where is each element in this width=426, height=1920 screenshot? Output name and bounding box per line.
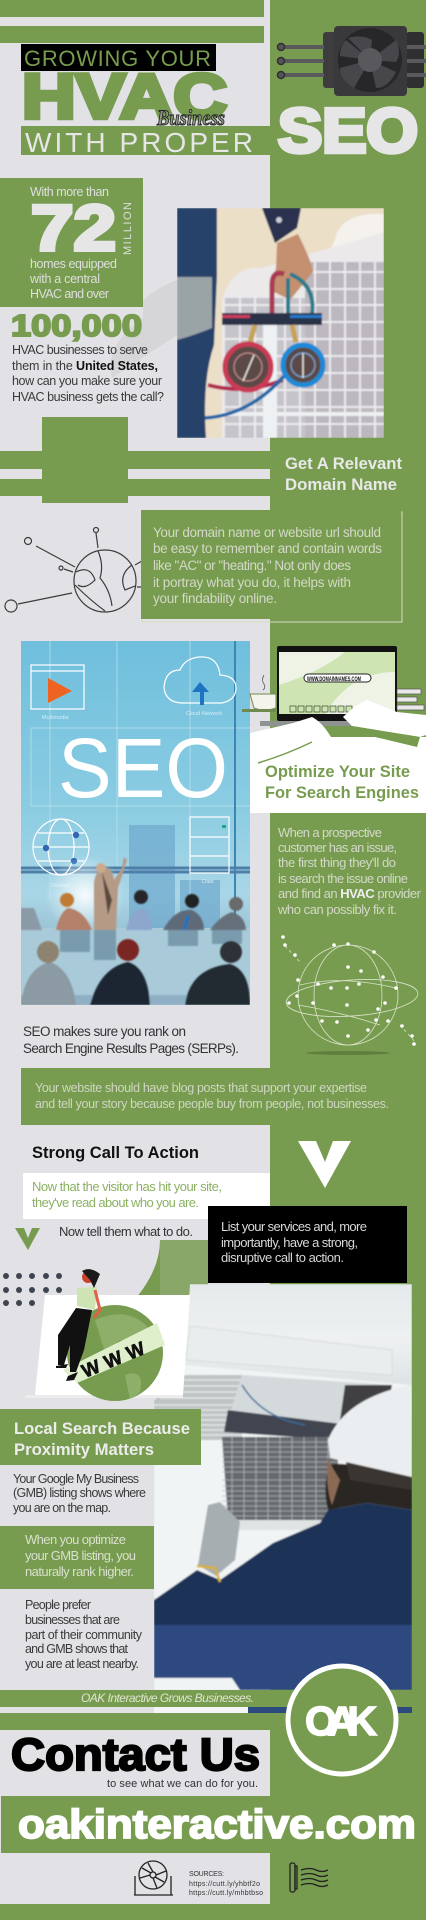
stat: 100,000 businesses: how can you make sure your bbox=[12, 374, 162, 388]
photo: technician with manifold gauges bbox=[177, 208, 384, 438]
logo: OAK badge: OAK bbox=[305, 1698, 377, 1744]
title: SEO bbox=[278, 97, 418, 166]
callout: visitor has hit your site: they've read about who you are. bbox=[32, 1195, 199, 1210]
panel: contact us: Contact Us bbox=[11, 1729, 260, 1780]
decorative dot grid bbox=[3, 1273, 62, 1306]
photo: SEO meeting room: Domain bbox=[51, 883, 70, 889]
band: OAK tagline: OAK Interactive Grows Businesses. bbox=[81, 1691, 254, 1705]
text: SEO makes sure bbox=[23, 1024, 239, 1056]
green background below tagline bbox=[0, 1713, 426, 1920]
panel: domain name text: your findability online. bbox=[153, 591, 277, 606]
panel: call to action text: importantly, have a strong, bbox=[221, 1235, 358, 1250]
top green bars bbox=[0, 0, 264, 43]
text: people prefer: and GMB shows that bbox=[25, 1642, 129, 1656]
stat: 100,000 businesses: HVAC business gets the call? bbox=[12, 390, 164, 404]
photo: SEO meeting room: Multimedia bbox=[42, 715, 70, 721]
panel: sources footer: https://cutt.ly/yhbtf2o bbox=[189, 1881, 260, 1888]
panel: optimize your site heading bbox=[250, 700, 426, 813]
stat: 100,000 businesses: HVAC businesses to serve bbox=[12, 343, 148, 357]
text: people prefer bbox=[25, 1598, 143, 1671]
panel: contact us bbox=[0, 1729, 270, 1795]
heading: get a relevant domain name: Domain Name bbox=[285, 476, 397, 494]
icon: large white chevron bbox=[298, 1141, 351, 1188]
band: OAK tagline bbox=[0, 1690, 426, 1707]
icon: dotted network globe bbox=[281, 935, 419, 1055]
panel: 72 million stat: With more than bbox=[30, 185, 109, 199]
panel: optimize GMB: When you optimize bbox=[25, 1532, 126, 1547]
panel: 72 million stat: with a central bbox=[29, 272, 100, 286]
panel: domain name text bbox=[141, 510, 402, 622]
callout: visitor has hit your site: Now that the visitor has hit your site, bbox=[32, 1179, 222, 1194]
panel: domain name text: it portray what you do, it helps with bbox=[153, 575, 351, 590]
text: prospective customer: the first thing they'll do bbox=[278, 855, 396, 870]
band: blog posts: and tell your story because people buy from people, not businesses. bbox=[35, 1097, 389, 1111]
stat: 100,000 businesses bbox=[11, 308, 164, 404]
illustration: WWW globe with woman on laptop bbox=[25, 1269, 190, 1401]
band: blog posts: Your website should have blog posts that support your expertise bbox=[35, 1081, 367, 1095]
text: prospective customer: who can possibly fix it. bbox=[277, 902, 397, 917]
illustration: laptop with domain search: WWW.DOMAINNAMES.COM bbox=[307, 676, 361, 683]
text: prospective customer: When a prospective bbox=[278, 825, 382, 840]
heading: local search bbox=[0, 1409, 201, 1465]
text: prospective customer: is search the issue online bbox=[278, 871, 408, 886]
panel: call to action text bbox=[208, 1206, 407, 1283]
photo: SEO meeting room: SEO bbox=[58, 721, 228, 815]
text: people prefer: businesses that are bbox=[25, 1613, 120, 1627]
panel: optimize your site heading: For Search Engines bbox=[265, 784, 419, 802]
heading: local search: Local Search Because bbox=[14, 1420, 190, 1438]
photo: technician servicing indoor unit bbox=[154, 1284, 412, 1690]
icon: cooling fan bbox=[278, 26, 426, 96]
title: Business bbox=[156, 105, 225, 130]
title: WITH PROPER bbox=[25, 127, 253, 158]
icon: line globe with nodes bbox=[5, 528, 142, 612]
title bbox=[21, 44, 418, 166]
heading: get a relevant domain name: Get A Relevant bbox=[285, 455, 402, 473]
text: SEO makes sure: Search Engine Results Pages (SERPs). bbox=[23, 1041, 239, 1056]
text: people prefer: part of their community bbox=[25, 1628, 143, 1642]
panel: optimize your site heading: Optimize Your Site bbox=[265, 763, 410, 781]
text: google my business bbox=[13, 1472, 146, 1515]
text: google my business: you are on the map. bbox=[13, 1501, 111, 1515]
stat: 100,000 businesses: them in the United States, bbox=[12, 359, 158, 373]
panel: 72 million stat: HVAC and over bbox=[30, 287, 109, 301]
panel: domain name text: like "AC" or "heating." Not only does bbox=[153, 558, 351, 573]
panel: 72 million stat: 72 bbox=[31, 192, 116, 264]
text: now tell them: Now tell them what to do. bbox=[59, 1224, 193, 1239]
icon: fan line art bbox=[134, 1861, 173, 1895]
panel: optimize GMB: naturally rank higher. bbox=[25, 1564, 134, 1579]
panel: sources footer: SOURCES: bbox=[189, 1871, 224, 1878]
panel: 72 million stat: MILLION bbox=[122, 202, 134, 255]
text: people prefer: you are at least nearby. bbox=[25, 1657, 139, 1671]
icon: air vent line art bbox=[290, 1863, 328, 1892]
panel: sources footer bbox=[0, 1853, 270, 1904]
band: blog posts bbox=[21, 1068, 389, 1125]
panel: 72 million stat bbox=[0, 178, 143, 307]
panel: domain name text: be easy to remember and contain words bbox=[153, 541, 382, 556]
title: HVAC bbox=[22, 62, 227, 132]
logo: OAK badge bbox=[288, 1666, 396, 1774]
panel: domain name text: Your domain name or website url should bbox=[153, 525, 381, 540]
text: people prefer: People prefer bbox=[25, 1598, 91, 1612]
heading: local search: Proximity Matters bbox=[14, 1441, 154, 1459]
band: website url: oakinteractive.com bbox=[18, 1801, 416, 1847]
band: below technician photo bbox=[154, 1707, 412, 1713]
divider cross block bbox=[0, 417, 270, 503]
text: google my business: Your Google My Business bbox=[13, 1472, 139, 1486]
illustration: WWW globe with woman on laptop: WWW bbox=[79, 1338, 148, 1383]
panel: call to action text: disruptive call to action. bbox=[221, 1250, 344, 1265]
panel: contact us: to see what we can do for you. bbox=[107, 1778, 258, 1790]
photo: SEO meeting room: Cloud Network bbox=[186, 711, 222, 717]
text: prospective customer bbox=[277, 825, 422, 917]
heading: strong call to action: Strong Call To Action bbox=[32, 1144, 199, 1162]
panel: 72 million stat: homes equipped bbox=[30, 257, 117, 271]
photo: SEO meeting room: Data bbox=[202, 879, 215, 885]
photo: SEO meeting room bbox=[21, 641, 256, 1005]
panel: optimize GMB: your GMB listing, you bbox=[25, 1548, 136, 1563]
decorative arc behind stat bbox=[111, 280, 177, 378]
panel: sources footer: https://cutt.ly/mhbtbso bbox=[189, 1890, 263, 1897]
panel: call to action text: List your services and, more bbox=[221, 1219, 367, 1234]
text: prospective customer: and find an HVAC provider bbox=[278, 886, 422, 901]
text: SEO makes sure: SEO makes sure you rank on bbox=[23, 1024, 186, 1039]
illustration: laptop with domain search bbox=[242, 646, 424, 726]
heading: get a relevant domain name bbox=[285, 455, 402, 494]
callout: visitor has hit your site bbox=[23, 1173, 270, 1219]
icon: small green chevron bbox=[15, 1228, 40, 1250]
green curve backdrop bbox=[125, 1240, 208, 1312]
panel: optimize GMB bbox=[0, 1526, 154, 1589]
text: google my business: (GMB) listing shows where bbox=[13, 1486, 146, 1500]
stat: 100,000 businesses: 100,000 bbox=[11, 308, 142, 343]
text: prospective customer: customer has an issue, bbox=[278, 840, 397, 855]
title: GROWING YOUR bbox=[24, 46, 211, 71]
